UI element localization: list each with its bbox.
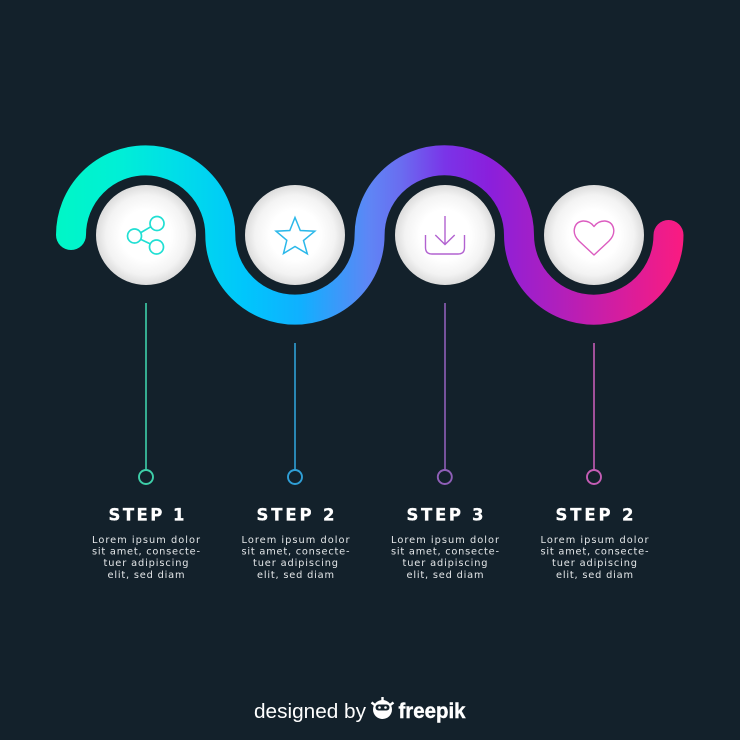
body: step 2: tuer adipiscing bbox=[253, 558, 338, 569]
circle 2 bbox=[245, 185, 345, 285]
body: step 1: elit, sed diam bbox=[108, 570, 184, 581]
body: step 4: sit amet, consecte- bbox=[540, 546, 649, 558]
icon: heart bbox=[574, 221, 614, 255]
body: step 1: tuer adipiscing bbox=[104, 558, 188, 569]
icon: share bbox=[128, 216, 164, 254]
circle 1 bbox=[96, 185, 196, 285]
body: step 2 bbox=[242, 535, 350, 581]
circle 3 bbox=[395, 185, 495, 285]
icon: freepik mascot bbox=[372, 697, 394, 719]
body: step 2: sit amet, consecte- bbox=[242, 546, 350, 558]
heading: step 1: STEP 1 bbox=[108, 506, 184, 524]
body: step 4 bbox=[540, 535, 649, 581]
body: step 3: tuer adipiscing bbox=[402, 558, 488, 569]
text block: step 3 bbox=[391, 506, 500, 581]
step 1 marker bbox=[96, 185, 196, 285]
body: step 1: sit amet, consecte- bbox=[92, 546, 200, 558]
footer credit bbox=[254, 697, 466, 723]
body: step 3 bbox=[391, 535, 500, 581]
credit text: designed by bbox=[254, 701, 366, 723]
body: step 3: elit, sed diam bbox=[406, 570, 484, 581]
body: step 4: elit, sed diam bbox=[556, 570, 633, 581]
connector 2 bbox=[288, 343, 302, 484]
body: step 1: Lorem ipsum dolor bbox=[92, 535, 201, 546]
icon: star bbox=[276, 218, 315, 254]
icon: download bbox=[426, 216, 464, 254]
connector 1 bbox=[139, 303, 153, 484]
text block: step 2 bbox=[242, 506, 350, 581]
body: step 3: Lorem ipsum dolor bbox=[391, 535, 500, 546]
step 3 marker bbox=[395, 185, 495, 285]
circle 4 bbox=[544, 185, 644, 285]
step 4 marker bbox=[544, 185, 644, 285]
heading: step 2: STEP 2 bbox=[256, 506, 334, 524]
connector 3 bbox=[438, 303, 452, 484]
text block: step 4 bbox=[540, 506, 649, 581]
heading: step 4: STEP 2 bbox=[556, 506, 634, 524]
body: step 4: tuer adipiscing bbox=[552, 558, 637, 569]
connector 4 bbox=[587, 343, 601, 484]
step 2 marker bbox=[245, 185, 345, 285]
body: step 1 bbox=[92, 535, 201, 581]
body: step 4: Lorem ipsum dolor bbox=[540, 535, 649, 546]
heading: step 3: STEP 3 bbox=[406, 506, 484, 524]
gradient wave ribbon bbox=[71, 160, 668, 310]
text block: step 1 bbox=[92, 506, 201, 581]
freepik wordmark: freepik bbox=[398, 700, 466, 723]
body: step 3: sit amet, consecte- bbox=[391, 546, 499, 558]
body: step 2: Lorem ipsum dolor bbox=[242, 535, 350, 546]
body: step 2: elit, sed diam bbox=[257, 570, 334, 581]
